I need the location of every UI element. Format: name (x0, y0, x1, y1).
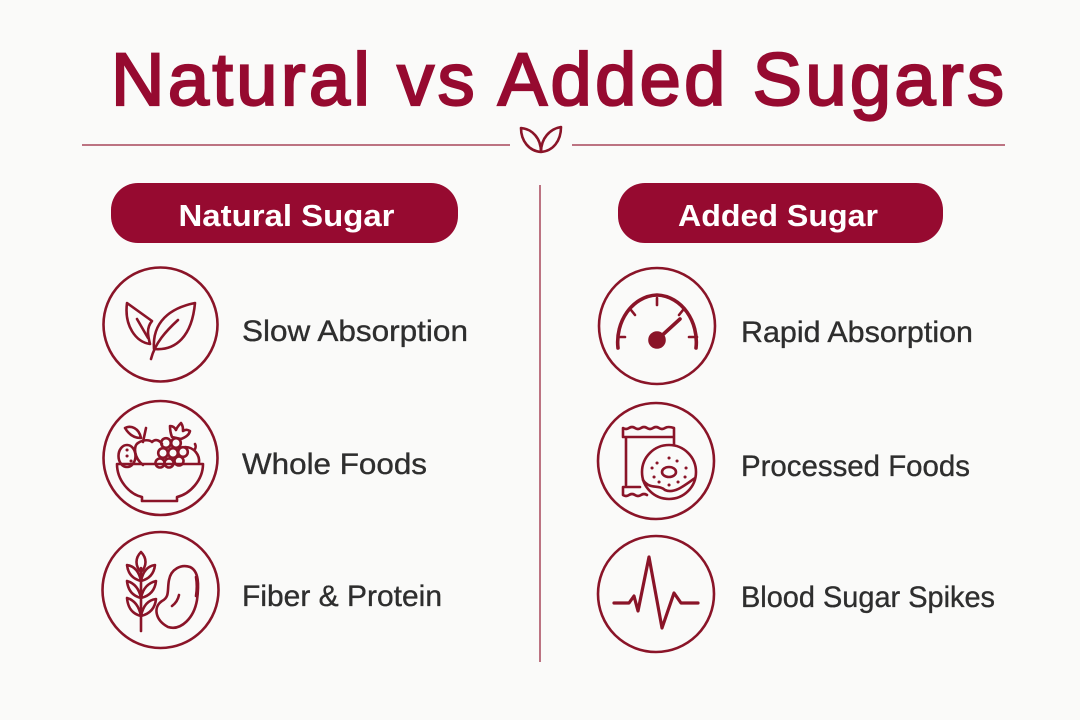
icon: leaves (104, 268, 218, 382)
label: slow absorption: Slow Absorption (242, 315, 468, 348)
heading: added sugar (618, 183, 943, 243)
panel: natural sugar (102, 183, 468, 648)
title divider with leaf icon (82, 127, 1005, 152)
label: rapid absorption: Rapid Absorption (741, 316, 973, 349)
heading: added sugar: Added Sugar (678, 198, 878, 233)
icon: snack bag and donut (598, 403, 714, 519)
heading: natural sugar (111, 183, 458, 243)
icon: wheat and bean (102, 532, 218, 648)
heading: natural sugar: Natural Sugar (178, 198, 394, 233)
label: blood sugar spikes: Blood Sugar Spikes (741, 581, 995, 614)
title: Natural vs Added Sugars (111, 38, 1004, 121)
label: whole foods: Whole Foods (242, 448, 427, 481)
panel: added sugar (598, 183, 995, 652)
icon: blood sugar pulse (598, 536, 714, 652)
icon: speedometer gauge (599, 268, 715, 384)
icon: fruit bowl (104, 401, 218, 515)
label: processed foods: Processed Foods (741, 450, 970, 483)
label: fiber and protein: Fiber & Protein (242, 580, 442, 613)
